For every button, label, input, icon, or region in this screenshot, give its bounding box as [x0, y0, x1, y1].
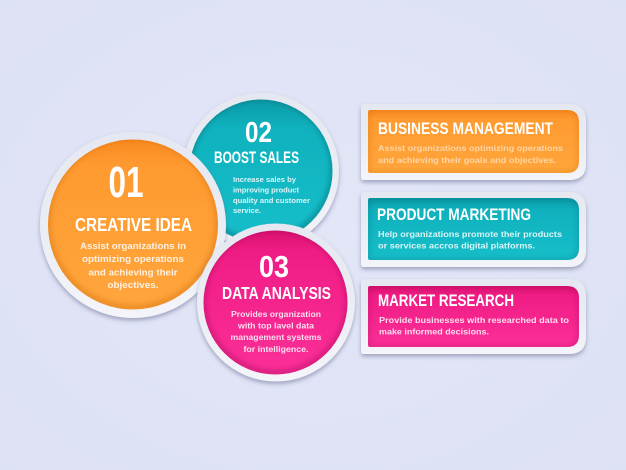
heading: boost sales: BOOST SALES	[214, 149, 299, 167]
panel: 03 data analysis circle	[197, 224, 355, 382]
text: business management description	[378, 143, 563, 165]
panel: 01 creative idea circle	[40, 132, 226, 318]
text: data analysis description: Provides organization	[231, 310, 321, 319]
text: creative idea description	[80, 241, 186, 290]
number 02: 02	[245, 117, 272, 149]
text: creative idea description: optimizing operations	[82, 254, 184, 264]
text: business management description: Assist organizations optimizing operations	[378, 143, 563, 153]
panel: product marketing	[361, 192, 586, 267]
text: market research description: make informed decisions.	[379, 326, 489, 336]
text: business management description: and achieving their goals and objectives.	[378, 155, 556, 165]
panel: 02 boost sales circle	[183, 93, 339, 249]
panel: business management	[361, 104, 586, 180]
text: creative idea description: and achieving their	[88, 268, 178, 278]
text: data analysis description	[230, 310, 322, 354]
text: creative idea description: Assist organizations in	[80, 241, 186, 251]
heading: business management: BUSINESS MANAGEMENT	[378, 120, 553, 138]
text: boost sales description: service.	[233, 206, 261, 215]
heading: product marketing: PRODUCT MARKETING	[377, 206, 531, 224]
heading: creative idea: CREATIVE IDEA	[75, 214, 192, 235]
text: data analysis description: for intelligence.	[244, 345, 308, 354]
text: boost sales description: Increase sales by	[233, 175, 297, 184]
heading: data analysis: DATA ANALYSIS	[222, 283, 331, 303]
text: product marketing description: Help organizations promote their products	[378, 229, 562, 239]
number 03: 03	[259, 249, 289, 284]
text: market research description: Provide businesses with researched data to	[379, 315, 569, 325]
text: creative idea description: objectives.	[108, 280, 158, 290]
text: boost sales description: quality and customer	[233, 196, 310, 205]
number 01: 01	[108, 158, 144, 207]
text: boost sales description	[233, 175, 310, 215]
text: market research description	[379, 315, 569, 336]
text: product marketing description: or services accros digital platforms.	[378, 240, 535, 250]
panel: market research	[361, 279, 586, 354]
text: product marketing description	[378, 229, 562, 250]
text: data analysis description: with top lavel data	[237, 322, 315, 330]
text: data analysis description: management systems	[230, 333, 322, 342]
text: boost sales description: improving product	[233, 186, 299, 194]
heading: market research: MARKET RESEARCH	[378, 292, 514, 310]
infographic canvas	[38, 100, 589, 386]
